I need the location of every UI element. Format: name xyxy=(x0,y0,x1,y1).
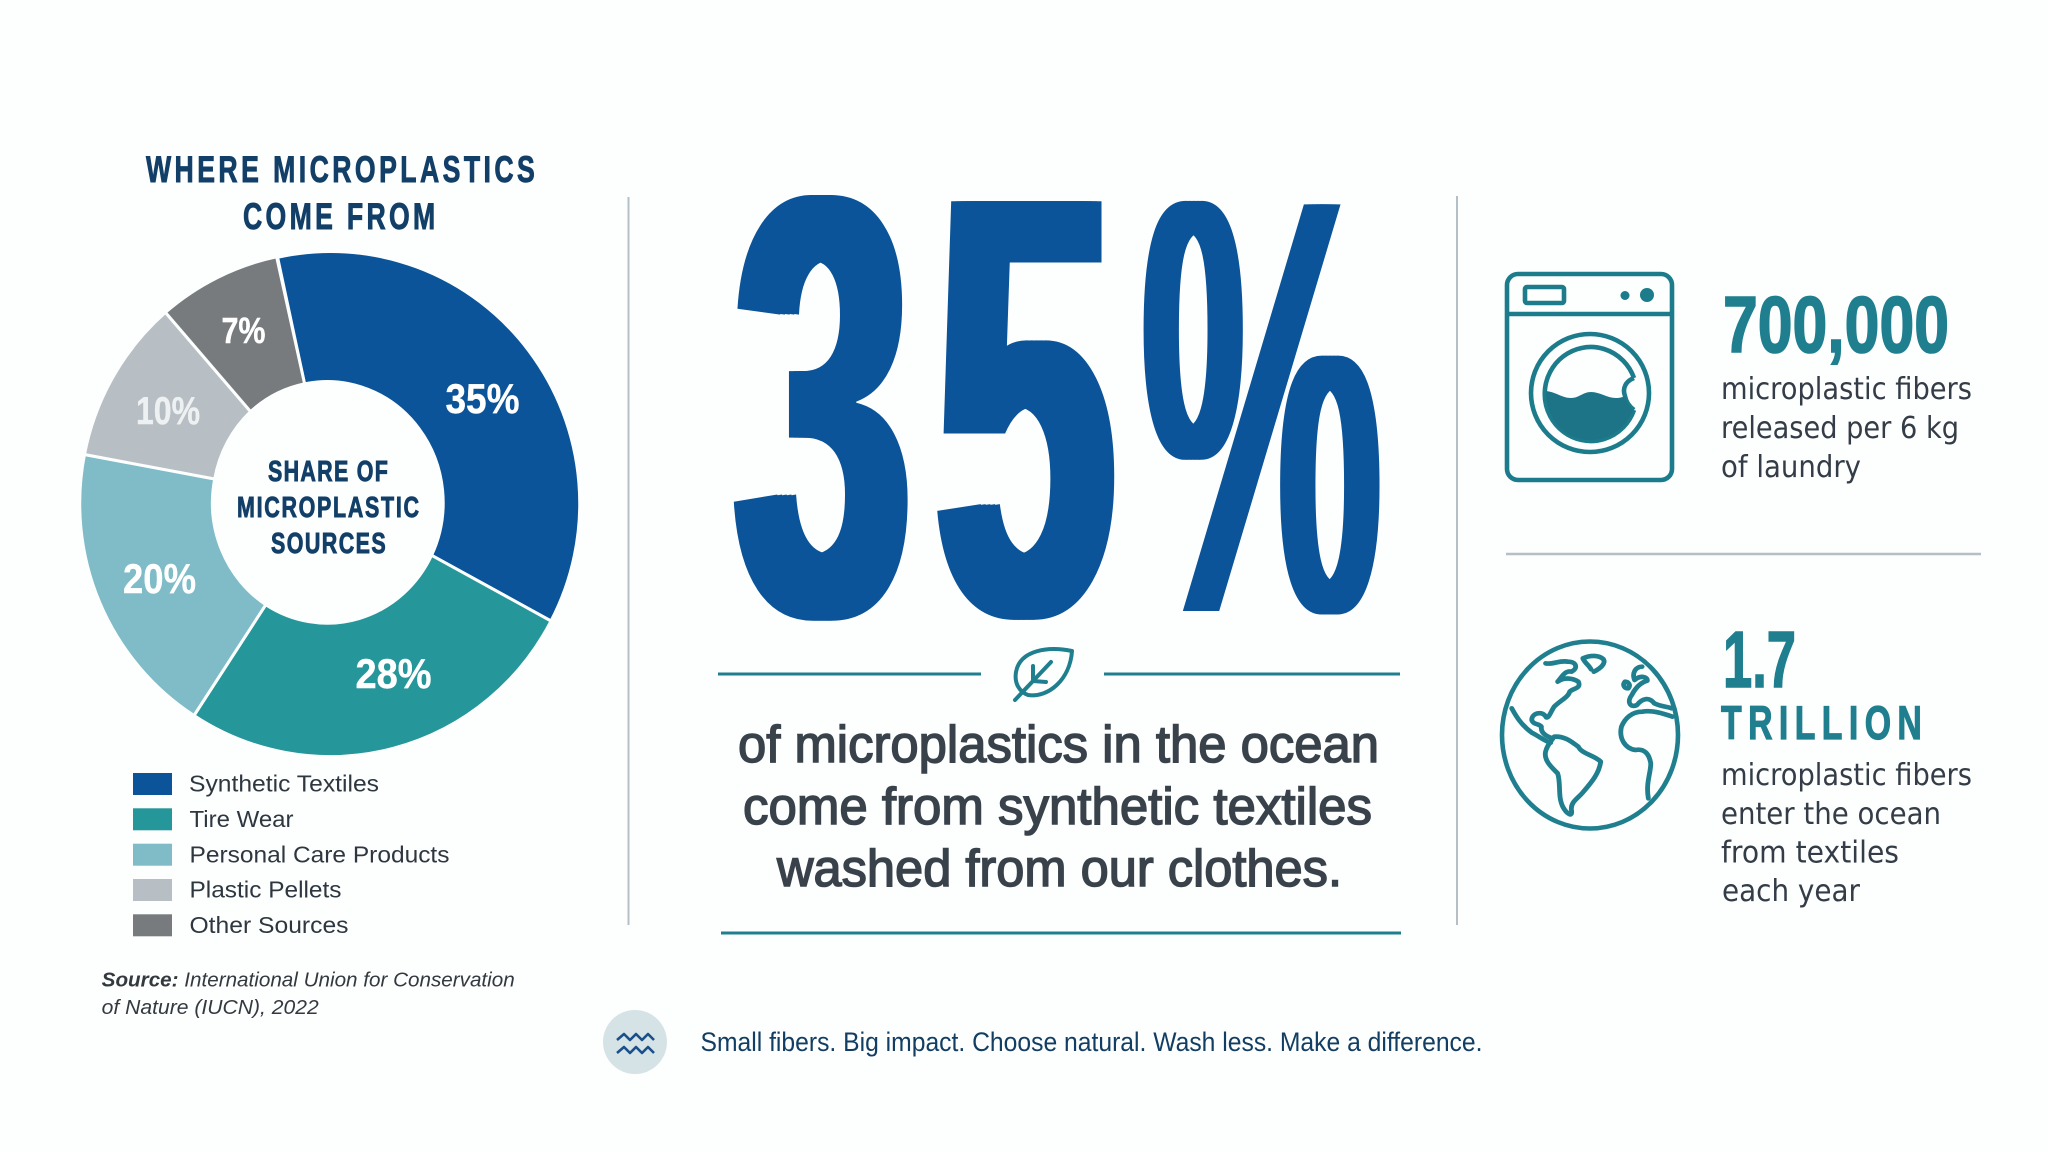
value labels: 20% xyxy=(123,555,196,602)
stat description: ocean xyxy=(1721,758,1972,909)
panel: laundry statistic xyxy=(1507,274,1972,485)
statement text: of microplastics in the ocean xyxy=(738,716,1379,774)
tagline: Small fibers. Big impact. Choose natural. Wash less. Make a difference. xyxy=(700,1027,1482,1057)
value labels: 28% xyxy=(356,650,432,697)
slice: plastic pellets 10% xyxy=(84,312,251,479)
stat description: laundry: microplastic fibers xyxy=(1721,372,1972,407)
stat: 1.7 trillion: TRILLION xyxy=(1721,697,1922,749)
source note: Source: International Union for Conservation xyxy=(102,970,515,992)
icon: globe xyxy=(1502,642,1678,828)
statement text: come from synthetic textiles xyxy=(743,778,1372,836)
legend: Synthetic Textiles xyxy=(189,771,379,797)
panel: microplastic sources xyxy=(80,149,580,1019)
icon: washing machine xyxy=(1507,274,1672,480)
slice: personal care products 20% xyxy=(80,454,266,716)
stat: 700,000: 700,000 xyxy=(1723,280,1949,369)
stat description: laundry: released per 6 kg xyxy=(1721,411,1959,446)
value labels xyxy=(123,310,520,697)
source note xyxy=(102,970,515,1019)
stat description: ocean: each year xyxy=(1722,874,1861,909)
donut centre label: MICROPLASTIC xyxy=(237,492,419,524)
stat: 1.7 trillion xyxy=(1721,615,1922,749)
value labels: 7% xyxy=(222,310,266,351)
stat description: ocean: from textiles xyxy=(1721,836,1899,870)
legend: Tire Wear xyxy=(190,806,294,832)
footer message xyxy=(603,1010,1482,1074)
icon: waves xyxy=(603,1010,667,1074)
donut centre label xyxy=(237,456,419,560)
heading: where microplastics come from xyxy=(146,149,535,237)
donut centre label: SHARE OF xyxy=(268,456,388,488)
legend xyxy=(133,771,450,938)
stat description: ocean: microplastic fibers xyxy=(1721,758,1972,793)
slice: other sources 7% xyxy=(165,257,305,412)
panel: ocean statistic xyxy=(1502,615,1972,909)
heading: where microplastics come from: WHERE MICROPLASTICS xyxy=(146,149,535,190)
icon: leaf xyxy=(1015,649,1072,700)
panel: key statement xyxy=(718,649,1401,933)
value labels: 10% xyxy=(136,390,200,433)
source note: of Nature (IUCN), 2022 xyxy=(102,997,319,1019)
hero stat: 35%: 5 xyxy=(937,72,1113,742)
legend: Plastic Pellets xyxy=(190,877,342,903)
hero stat: 35%: % xyxy=(1142,77,1381,737)
donut centre label: SOURCES xyxy=(271,528,386,560)
statement text: washed from our clothes. xyxy=(776,840,1342,898)
legend: Other Sources xyxy=(190,912,348,938)
slice: synthetic textiles 35% xyxy=(278,251,580,621)
value labels: 35% xyxy=(446,375,520,422)
hero stat: 35%: 3 xyxy=(736,72,909,742)
slice: tire wear 28% xyxy=(194,555,551,757)
statement text xyxy=(738,716,1379,898)
hero stat: 35% xyxy=(734,72,1381,742)
stat description: ocean: enter the ocean xyxy=(1721,797,1941,832)
donut chart xyxy=(80,251,580,757)
heading: where microplastics come from: COME FROM xyxy=(243,196,435,237)
stat description: laundry xyxy=(1721,372,1972,485)
stat description: laundry: of laundry xyxy=(1721,450,1861,485)
stat: 1.7 trillion: 1.7 xyxy=(1723,615,1796,704)
legend: Personal Care Products xyxy=(190,841,450,867)
